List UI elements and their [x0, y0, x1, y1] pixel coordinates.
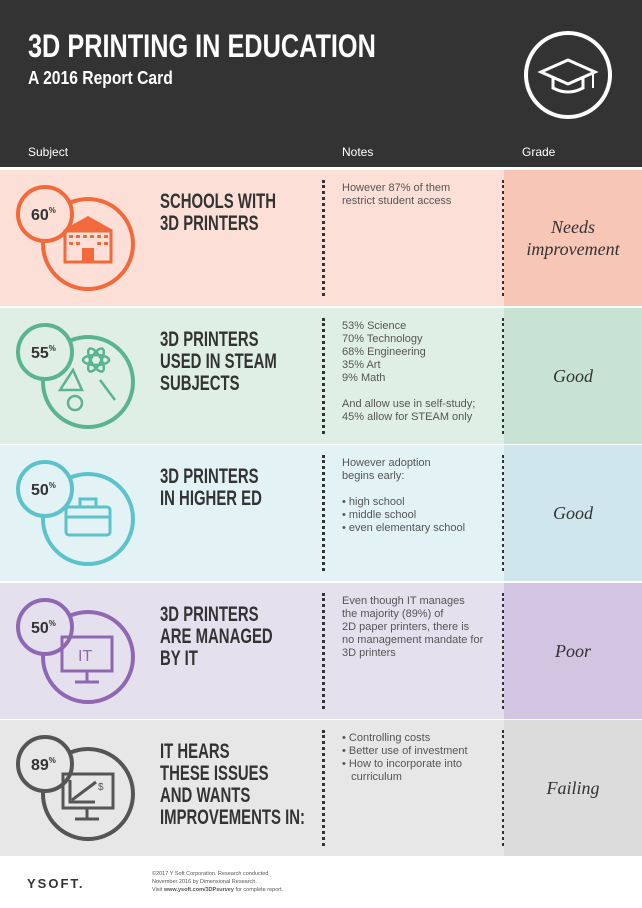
subject title: 3D PRINTERS	[160, 212, 259, 235]
notes: However 87% of them	[342, 182, 450, 194]
grade	[504, 720, 642, 856]
subject title: AND WANTS	[160, 784, 250, 807]
grade	[504, 308, 642, 444]
header: Subject	[28, 145, 68, 159]
grade: Good	[553, 503, 593, 523]
row 3: higher ed	[0, 445, 642, 581]
subject title: 3D PRINTERS	[160, 328, 259, 351]
footer text: November 2016 by Dimensional Research.	[152, 879, 257, 885]
notes	[342, 595, 484, 659]
subject title: SCHOOLS WITH	[160, 190, 276, 213]
grade: improvement	[526, 239, 620, 259]
notes: no management mandate for	[342, 634, 483, 646]
grade: Good	[553, 366, 593, 386]
icon: school: 60	[31, 207, 49, 224]
subject title: 3D PRINTERS	[160, 465, 259, 488]
icon: IT monitor: 50	[31, 620, 49, 637]
header: Grade	[522, 145, 555, 159]
notes: And allow use in self-study;	[342, 398, 475, 410]
row 2: steam	[0, 308, 642, 444]
row 5: issues	[0, 720, 642, 856]
notes: 9% Math	[342, 372, 385, 384]
title: 3D PRINTING IN EDUCATION	[28, 28, 376, 64]
icon: chart monitor	[16, 735, 135, 841]
grade: Poor	[555, 641, 591, 661]
header: Notes	[342, 145, 373, 159]
subject title: IMPROVEMENTS IN:	[160, 806, 305, 829]
icon: chart monitor: $	[98, 782, 104, 793]
row 4: IT	[0, 583, 642, 719]
subject title: 3D PRINTERS	[160, 603, 259, 626]
subject title	[160, 328, 277, 395]
logo: YSOFT.	[27, 876, 85, 891]
subject title: THESE ISSUES	[160, 762, 269, 785]
icon: IT monitor: IT	[78, 648, 92, 665]
subject title	[160, 465, 262, 510]
footer text	[152, 871, 283, 893]
notes: • Controlling costs	[342, 732, 430, 744]
subject title	[160, 740, 305, 829]
icon: chart monitor: %	[49, 756, 56, 765]
icon: IT monitor: %	[49, 619, 56, 628]
subject title: BY IT	[160, 647, 198, 670]
subject title: SUBJECTS	[160, 372, 240, 395]
notes: • How to incorporate into	[342, 758, 462, 770]
notes: • Better use of investment	[342, 745, 468, 757]
notes: restrict student access	[342, 195, 451, 207]
notes: 3D printers	[342, 647, 396, 659]
icon: school: %	[49, 206, 56, 215]
icon: IT monitor	[16, 598, 135, 704]
notes: • high school	[342, 496, 405, 508]
icon: toolbox	[16, 460, 135, 566]
footer text: ©2017 Y Soft Corporation. Research conducted	[152, 871, 268, 877]
row 1: schools	[0, 170, 642, 306]
footer text: Visit www.ysoft.com/3DPsurvey for complete report.	[152, 887, 283, 893]
notes	[342, 320, 475, 423]
icon: toolbox: 50	[31, 482, 49, 499]
header	[0, 0, 642, 167]
subject title: ARE MANAGED	[160, 625, 273, 648]
subject title	[160, 603, 273, 670]
column headers	[28, 145, 555, 159]
notes	[342, 732, 468, 783]
notes: the majority (89%) of	[342, 608, 443, 620]
notes: 70% Technology	[342, 333, 423, 345]
icon: school	[16, 185, 135, 291]
subject title	[160, 190, 276, 235]
grade	[504, 170, 642, 306]
subject title: IT HEARS	[160, 740, 230, 763]
notes: 35% Art	[342, 359, 381, 371]
subtitle: A 2016 Report Card	[28, 68, 173, 88]
notes: curriculum	[351, 771, 402, 783]
notes: 53% Science	[342, 320, 406, 332]
icon: toolbox: %	[49, 481, 56, 490]
icon: steam: 55	[31, 345, 49, 362]
notes	[342, 457, 465, 534]
notes: 2D paper printers, there is	[342, 621, 469, 633]
subject title: USED IN STEAM	[160, 350, 277, 373]
notes: However adoption	[342, 457, 431, 469]
notes: 45% allow for STEAM only	[342, 411, 472, 423]
icon: chart monitor: 89	[31, 757, 49, 774]
icon: steam	[16, 323, 135, 429]
grade: Needs	[551, 217, 595, 237]
notes: 68% Engineering	[342, 346, 426, 358]
grade: Failing	[546, 778, 600, 798]
notes: • middle school	[342, 509, 416, 521]
grade	[504, 445, 642, 581]
notes: • even elementary school	[342, 522, 465, 534]
subject title: IN HIGHER ED	[160, 487, 262, 510]
notes	[342, 182, 451, 207]
icon: graduation cap	[524, 31, 612, 119]
icon: steam: %	[49, 344, 56, 353]
notes: begins early:	[342, 470, 404, 482]
notes: Even though IT manages	[342, 595, 465, 607]
grade	[504, 583, 642, 719]
